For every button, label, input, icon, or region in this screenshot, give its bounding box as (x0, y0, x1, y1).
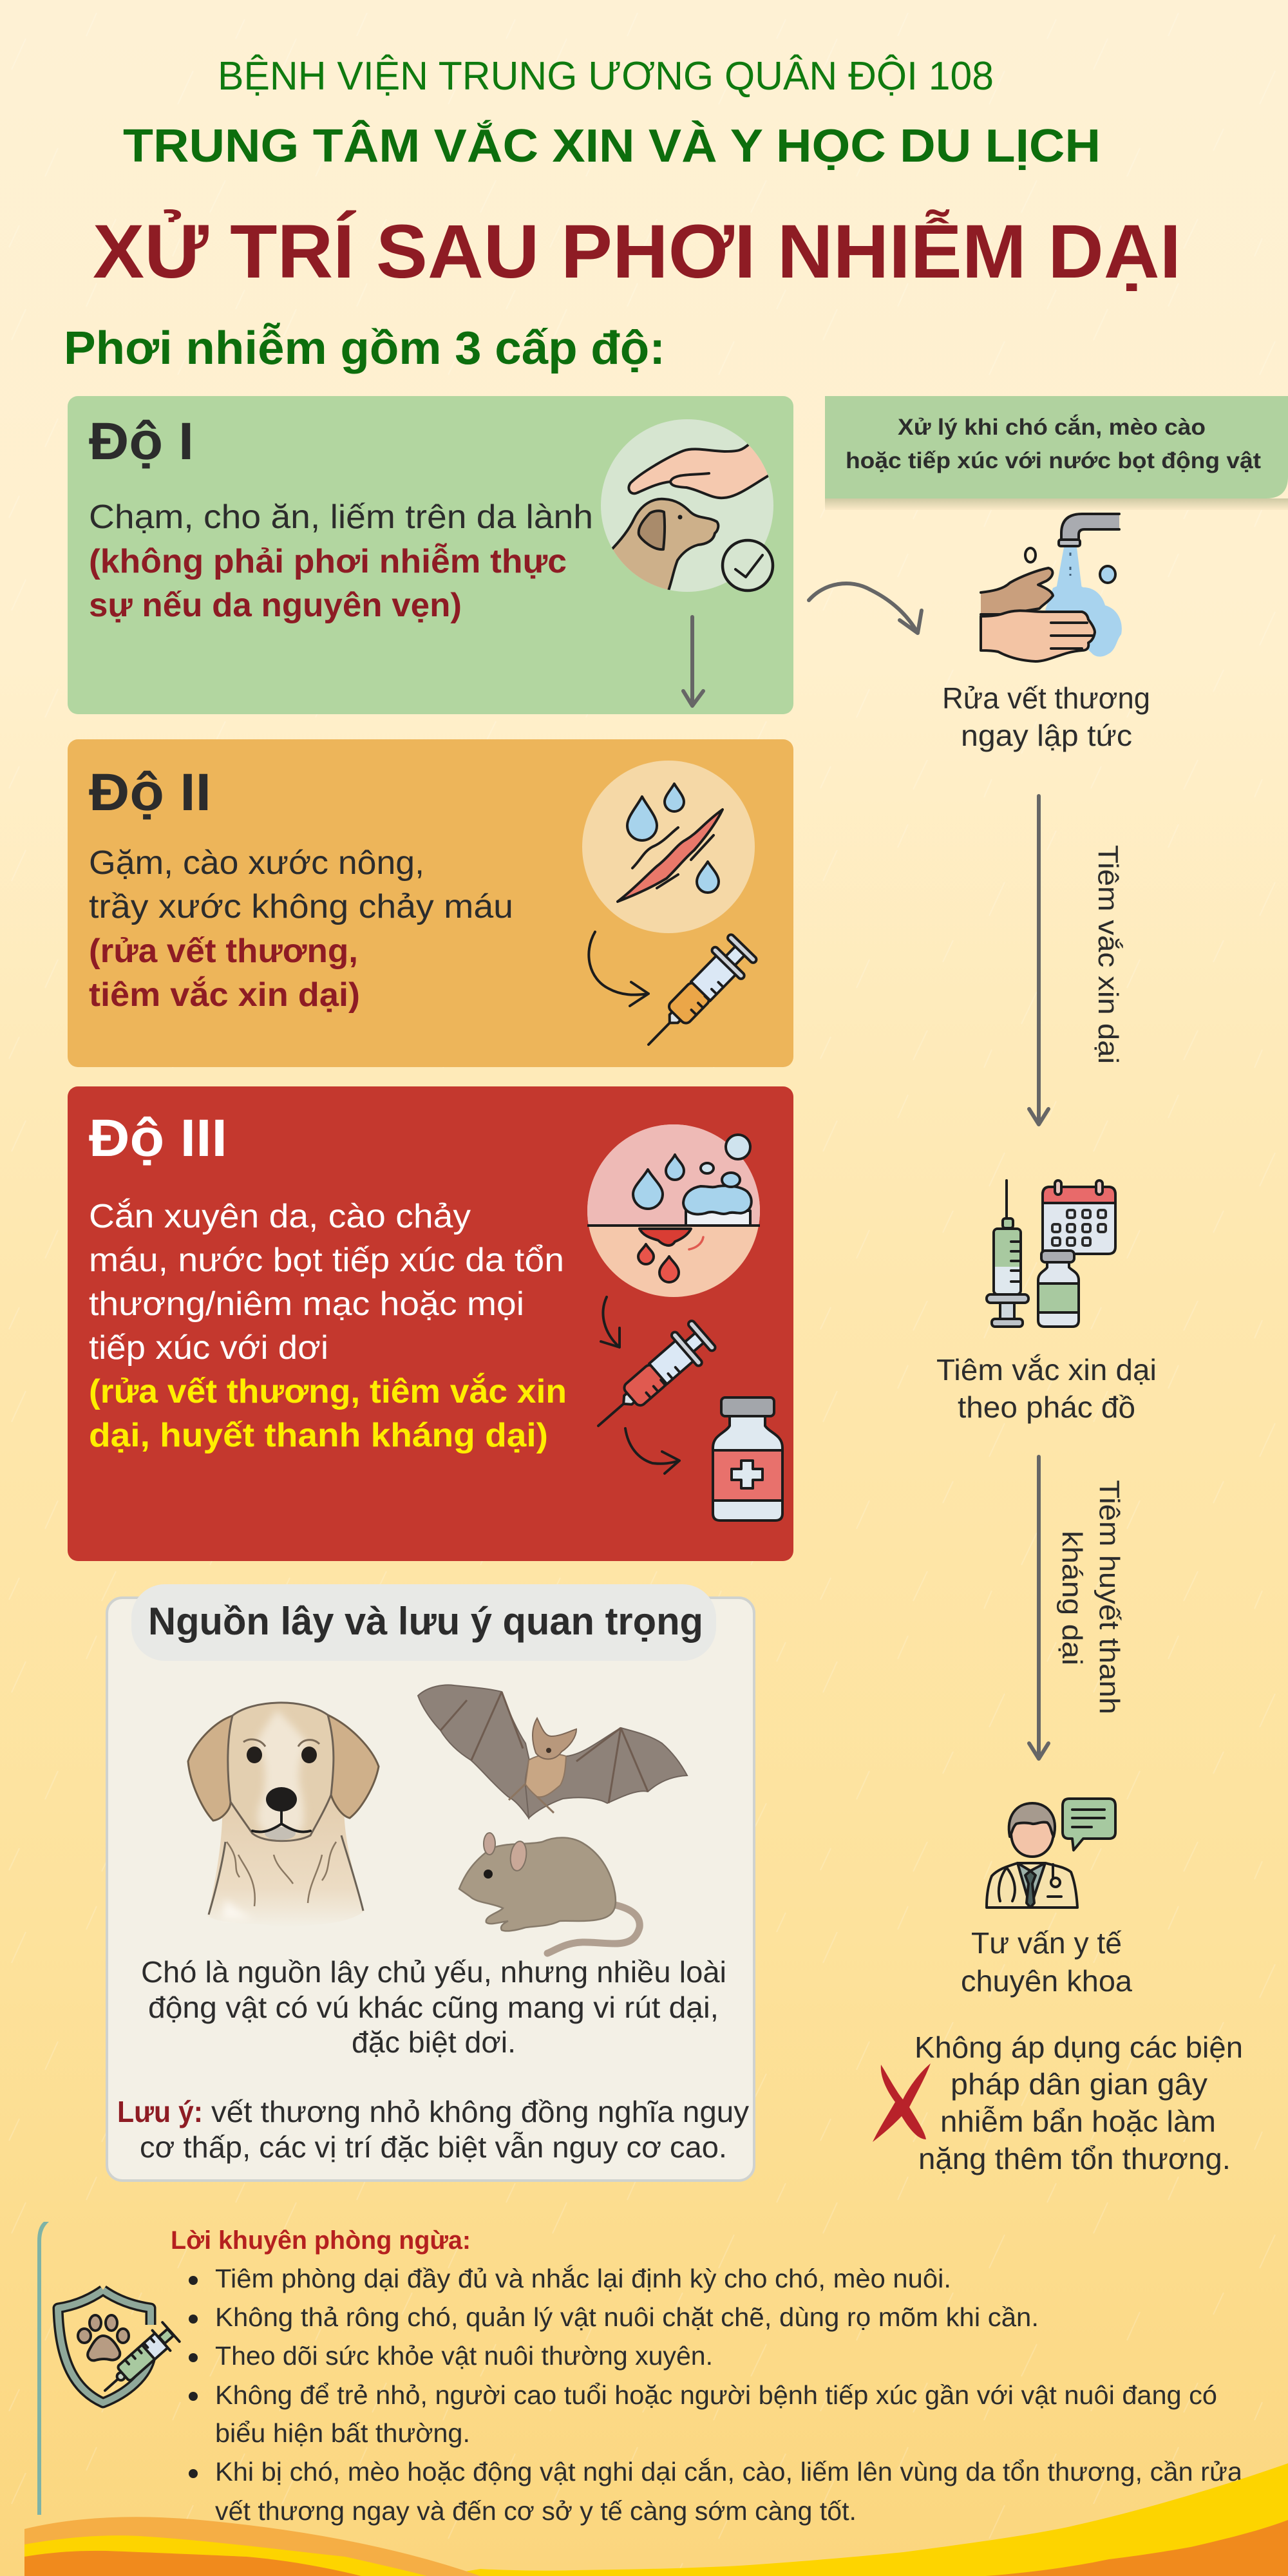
arrow: vaccine to consult (1029, 1457, 1048, 1759)
label: antiserum arrow: kháng dại (1056, 1531, 1088, 1665)
panel: level I (68, 396, 793, 714)
note: Lưu ý: (117, 2095, 203, 2128)
header: hospital name: BỆNH VIỆN TRUNG ƯƠNG QUÂN ĐỘI 108 (218, 54, 994, 99)
bullet list: Khi bị chó, mèo hoặc động vật nghi dại cắn, cào, liếm lên vùng da tổn thương, cần rửa (215, 2457, 1242, 2486)
icon: vaccine, vial and calendar (987, 1180, 1115, 1327)
panel: treatment header (825, 396, 1288, 510)
icon: doctor with speech bubble (987, 1799, 1115, 1908)
level III description (89, 1198, 567, 1454)
level III description: tiếp xúc với dơi (89, 1329, 328, 1367)
step: vaccination: Tiêm vắc xin dại (936, 1353, 1157, 1387)
step: specialist consultation (961, 1926, 1132, 1998)
note: vết thương nhỏ không đồng nghĩa nguy (211, 2095, 749, 2128)
level II description: trầy xước không chảy máu (89, 888, 513, 925)
step: wash wound: Rửa vết thương (942, 681, 1150, 715)
source description: Chó là nguồn lây chủ yếu, nhưng nhiều loài (141, 1955, 726, 1989)
warning text: nặng thêm tổn thương. (918, 2142, 1231, 2175)
accent line: prevention (37, 2222, 49, 2515)
level I heading: Độ I (89, 412, 194, 471)
label: antiserum arrow (1056, 1480, 1125, 1714)
warning text (914, 2031, 1243, 2175)
panel: level II (68, 739, 793, 1067)
icon: red cross mark (873, 2063, 931, 2142)
step: vaccination: theo phác đồ (958, 1390, 1135, 1424)
icon: hand petting dog (601, 419, 782, 599)
header text (846, 414, 1261, 473)
step: specialist consultation: Tư vấn y tế (971, 1926, 1122, 1960)
level I description: (không phải phơi nhiễm thực (89, 543, 567, 580)
panel: level III (68, 1086, 793, 1561)
bullet list: Tiêm phòng dại đầy đủ và nhắc lại định kỳ cho chó, mèo nuôi. (215, 2264, 951, 2293)
bullet list: Không thả rông chó, quản lý vật nuôi chặt chẽ, dùng rọ mõm khi cần. (215, 2302, 1039, 2332)
source description (141, 1955, 726, 2059)
arrow: level I to washing (809, 583, 922, 633)
step: wash wound (942, 681, 1150, 752)
icon: wound cleaning with foam (587, 1124, 760, 1297)
icon: hand washing (981, 514, 1122, 661)
note (117, 2095, 749, 2164)
source description: động vật có vú khác cũng mang vi rút dại, (148, 1991, 719, 2024)
level I description: Chạm, cho ăn, liếm trên da lành (89, 498, 593, 536)
prevention advice (171, 2226, 1242, 2526)
level I description (89, 498, 593, 624)
panel: sources of infection (107, 1584, 754, 2181)
arrow: wash to vaccine (1029, 796, 1048, 1124)
illustration: rat (459, 1833, 639, 1953)
arrow: curved to syringe (601, 1297, 620, 1347)
level III description: dại, huyết thanh kháng dại) (89, 1417, 548, 1454)
bullet list (189, 2264, 1242, 2526)
main title: XỬ TRÍ SAU PHƠI NHIỄM DẠI (93, 209, 1181, 294)
level II description (89, 844, 513, 1014)
warning text: Không áp dụng các biện (914, 2031, 1243, 2064)
arrow: curved to syringe (589, 932, 649, 1006)
level II description: tiêm vắc xin dại) (89, 976, 360, 1014)
level III heading: Độ III (89, 1109, 227, 1168)
prevention heading: Lời khuyên phòng ngừa: (171, 2226, 471, 2255)
step: vaccination (936, 1353, 1157, 1424)
header text: hoặc tiếp xúc với nước bọt động vật (846, 448, 1261, 473)
note: cơ thấp, các vị trí đặc biệt vẫn nguy cơ cao. (140, 2130, 727, 2164)
step: wash wound: ngay lập tức (961, 719, 1132, 752)
footer waves (24, 2463, 1288, 2576)
level I description: sự nếu da nguyên vẹn) (89, 587, 462, 624)
header text: Xử lý khi chó cắn, mèo cào (898, 414, 1206, 440)
icon: syringe (584, 1318, 718, 1442)
level III description: (rửa vết thương, tiêm vắc xin (89, 1372, 567, 1410)
bullet list: biểu hiện bất thường. (215, 2418, 470, 2448)
warning text: pháp dân gian gây (951, 2067, 1208, 2101)
icon: syringe (633, 932, 759, 1059)
level II heading: Độ II (89, 763, 211, 822)
step: specialist consultation: chuyên khoa (961, 1964, 1132, 1998)
arrow: level I down (683, 617, 703, 706)
title tab: Nguồn lây và lưu ý quan trọng (148, 1600, 703, 1643)
title tab (131, 1584, 716, 1661)
bullet list: vết thương ngay và đến cơ sở y tế càng sớm càng tốt. (215, 2496, 857, 2526)
level III description: Cắn xuyên da, cào chảy (89, 1198, 471, 1235)
illustration: dog (188, 1703, 379, 1927)
bullet list: Theo dõi sức khỏe vật nuôi thường xuyên. (215, 2341, 713, 2371)
source description: đặc biệt dơi. (352, 2025, 516, 2059)
level III description: máu, nước bọt tiếp xúc da tổn (89, 1242, 564, 1279)
label: antiserum arrow: Tiêm huyết thanh (1094, 1480, 1125, 1714)
bullet list: Không để trẻ nhỏ, người cao tuổi hoặc người bệnh tiếp xúc gần với vật nuôi đang có (215, 2380, 1217, 2410)
icon: scratch wound with drops (582, 761, 755, 933)
warning text: nhiễm bẩn hoặc làm (940, 2105, 1216, 2138)
illustration: bat (418, 1685, 687, 1818)
subtitle: three levels: Phơi nhiễm gồm 3 cấp độ: (64, 323, 665, 374)
level II description: Gặm, cào xước nông, (89, 844, 424, 882)
label: vaccination arrow: Tiêm vắc xin dại (1092, 845, 1124, 1064)
icon: shield with paw and syringe (58, 2290, 180, 2403)
level II description: (rửa vết thương, (89, 933, 358, 970)
level III description: thương/niêm mạc hoặc mọi (89, 1285, 524, 1323)
icon: medicine bottle (713, 1397, 782, 1520)
header: center name: TRUNG TÂM VẮC XIN VÀ Y HỌC DU LỊCH (123, 120, 1101, 172)
arrow: curved to bottle (625, 1428, 679, 1473)
